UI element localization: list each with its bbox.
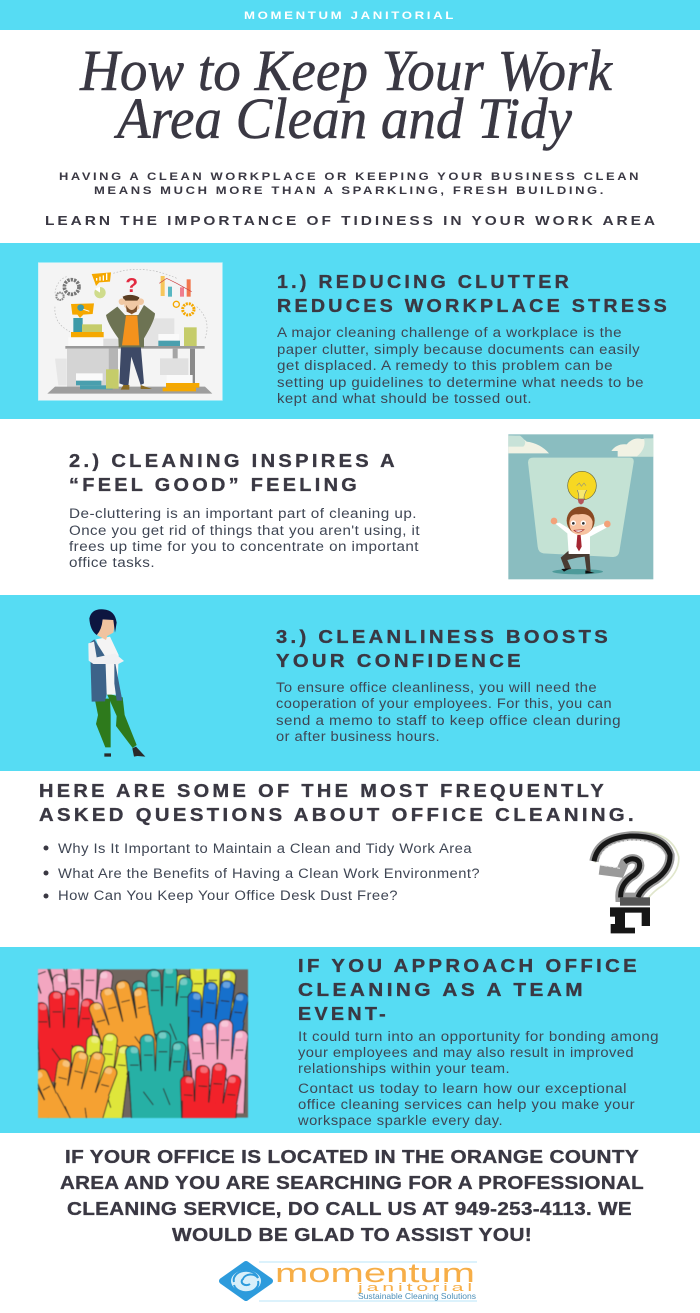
heading: reducing clutter <box>277 272 670 316</box>
top banner <box>0 0 700 30</box>
panel: feel good <box>69 434 653 579</box>
title: How to Keep Your Work <box>79 38 613 103</box>
heading: FAQ <box>39 781 637 825</box>
wordmark: momentum <box>275 1258 475 1288</box>
body: reducing clutter: paper clutter, simply because documents can easily <box>277 342 640 357</box>
body: confidence: send a memo to staff to keep office clean during <box>276 713 621 728</box>
heading: team event: EVENT- <box>298 1004 389 1024</box>
heading: confidence: YOUR CONFIDENCE <box>276 651 524 671</box>
body: confidence: or after business hours. <box>276 729 440 744</box>
body: reducing clutter: kept and what should be tossed out. <box>277 391 532 406</box>
icon: question mark <box>594 832 679 933</box>
tagline: Sustainable Cleaning Solutions <box>358 1291 476 1301</box>
heading: reducing clutter: 1.) REDUCING CLUTTER <box>277 272 572 292</box>
body: team event: office cleaning services can help you make your <box>298 1097 635 1112</box>
panel: reducing clutter <box>0 243 700 419</box>
FAQ list: Why Is It Important to Maintain a Clean and Tidy Work Area <box>58 841 472 856</box>
body: feel good: De-cluttering is an important part of cleaning up. <box>69 506 417 521</box>
sub-wordmark: janitorial <box>356 1282 476 1294</box>
heading: feel good: “FEEL GOOD” FEELING <box>69 475 360 495</box>
body: feel good: office tasks. <box>69 555 155 570</box>
body: feel good: frees up time for you to concentrate on important <box>69 539 419 554</box>
heading: FAQ: ASKED QUESTIONS ABOUT OFFICE CLEANING. <box>39 805 637 825</box>
illustration: man with light bulb <box>508 434 653 579</box>
illustration: confident woman <box>88 609 145 757</box>
heading: confidence <box>276 627 611 671</box>
FAQ list: What Are the Benefits of Having a Clean Work Environment? <box>58 866 480 881</box>
body: confidence <box>276 680 621 744</box>
heading: reducing clutter: REDUCES WORKPLACE STRESS <box>277 296 670 316</box>
title: Area Clean and Tidy <box>113 86 572 151</box>
FAQ list: How Can You Keep Your Office Desk Dust Free? <box>58 888 398 903</box>
body: reducing clutter <box>277 325 644 406</box>
body: reducing clutter: A major cleaning challenge of a workplace is the <box>277 325 622 340</box>
panel: team event <box>0 945 700 1169</box>
title <box>79 38 613 151</box>
heading: FAQ: HERE ARE SOME OF THE MOST FREQUENTLY <box>39 781 607 801</box>
body: confidence: cooperation of your employees. For this, you can <box>276 696 612 711</box>
logo: Momentum Janitorial <box>222 1258 477 1301</box>
heading: feel good <box>69 451 398 495</box>
intro text: HAVING A CLEAN WORKPLACE OR KEEPING YOUR BUSINESS CLEAN <box>59 171 641 183</box>
illustration: stressed man at cluttered desk: ? <box>125 274 138 297</box>
heading: team event <box>298 956 640 1024</box>
body: team event <box>297 1029 659 1128</box>
body: reducing clutter: setting up guidelines to determine what needs to be <box>277 375 644 390</box>
subheading: LEARN THE IMPORTANCE OF TIDINESS IN YOUR WORK AREA <box>45 214 658 228</box>
body: team event: relationships within your team. <box>298 1061 510 1076</box>
closing call to action <box>60 1147 644 1245</box>
body: team event: workspace sparkle every day. <box>297 1113 503 1128</box>
brand name: MOMENTUM JANITORIAL <box>244 10 456 22</box>
body: team event: Contact us today to learn how our exceptional <box>298 1081 627 1096</box>
illustration: stressed man at cluttered desk <box>38 263 222 400</box>
icon: spiral diamond <box>222 1264 270 1298</box>
body: reducing clutter: get displaced. A remedy to this problem can be <box>277 358 613 373</box>
body: feel good: Once you get rid of things that you aren't using, it <box>69 523 420 538</box>
body: team event: your employees and may also result in improved <box>298 1045 634 1060</box>
closing call to action: CLEANING SERVICE, DO CALL US AT 949-253-4113. WE <box>67 1199 632 1219</box>
heading: team event: CLEANING AS A TEAM <box>298 980 586 1000</box>
intro text: MEANS MUCH MORE THAN A SPARKLING, FRESH BUILDING. <box>94 185 606 197</box>
body: feel good <box>69 506 420 570</box>
heading: confidence: 3.) CLEANLINESS BOOSTS <box>276 627 611 647</box>
intro text <box>59 171 641 197</box>
image: colorful hands <box>0 945 251 1169</box>
closing call to action: WOULD BE GLAD TO ASSIST YOU! <box>172 1225 532 1245</box>
heading: feel good: 2.) CLEANING INSPIRES A <box>69 451 398 471</box>
closing call to action: IF YOUR OFFICE IS LOCATED IN THE ORANGE COUNTY <box>65 1147 639 1167</box>
body: confidence: To ensure office cleanliness, you will need the <box>276 680 597 695</box>
closing call to action: AREA AND YOU ARE SEARCHING FOR A PROFESSIONAL <box>60 1173 644 1193</box>
body: team event: It could turn into an opportunity for bonding among <box>298 1029 659 1044</box>
panel: FAQ <box>39 781 679 933</box>
panel: confidence <box>0 595 700 771</box>
FAQ list <box>44 841 480 903</box>
heading: team event: IF YOU APPROACH OFFICE <box>298 956 640 976</box>
